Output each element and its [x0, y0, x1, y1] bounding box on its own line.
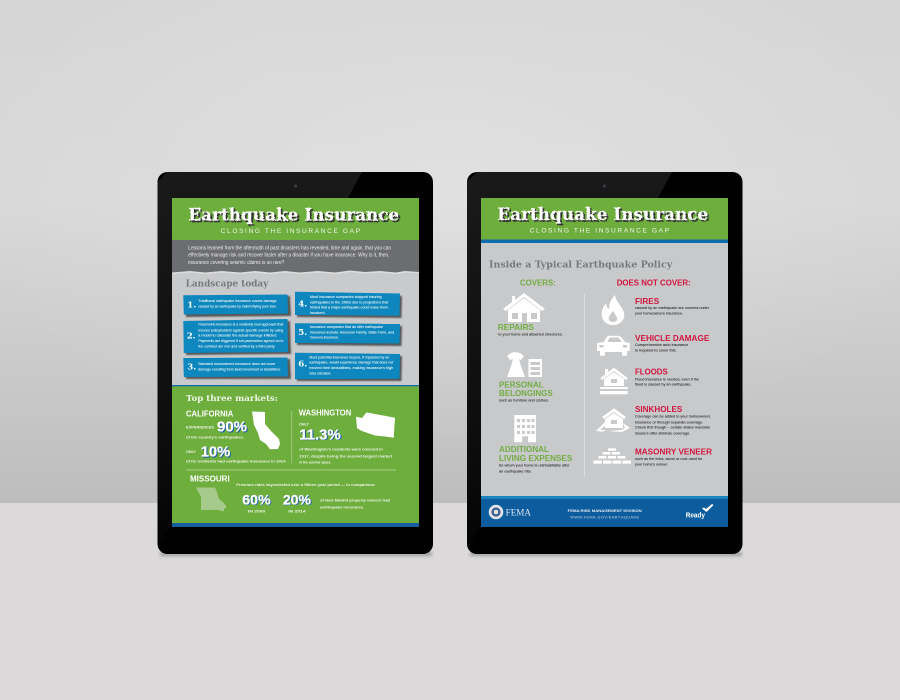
- repairs text: [498, 322, 563, 336]
- tablet: right page: [465, 172, 742, 556]
- icon: apartment building: [514, 415, 536, 442]
- washington stats: 11.3%: [300, 427, 342, 444]
- callout 6: [295, 353, 402, 381]
- fires text: caused by an earthquake are covered under: [635, 306, 710, 310]
- personal belongings text: BELONGINGS: [499, 388, 553, 398]
- callout 1: caused by an earthquake by indemnifying pure loss.: [198, 304, 277, 309]
- sinkholes text: Check first though – certain states mandate: [635, 426, 710, 430]
- sinkholes text: insurance or through separate coverage.: [635, 420, 703, 424]
- callout 1: Traditional earthquake insurance covers damage: [198, 298, 277, 303]
- washington stats: ONLY: [299, 422, 309, 427]
- washington stats: [299, 409, 393, 464]
- fires text: [635, 296, 710, 316]
- additional living expenses text: ADDITIONAL: [499, 444, 549, 454]
- callout 4: 4.: [298, 300, 307, 310]
- callout 4: Most insurance companies stopped insuring: [310, 294, 382, 299]
- icon: ready check mark: [686, 504, 714, 520]
- callout 6: earthquake, would experience damage that does not: [309, 360, 394, 365]
- icon: house repairs: [503, 293, 545, 322]
- repairs text: REPAIRS: [498, 322, 534, 332]
- tablet: left page: [155, 172, 433, 556]
- california stats: 10%: [201, 444, 230, 461]
- additional living expenses text: [499, 444, 573, 473]
- california stats: 90%: [218, 420, 248, 437]
- masonry veneer text: such as the brick, stone or rock used for: [635, 457, 703, 461]
- california stats: of the country's earthquakes.: [186, 435, 244, 440]
- icon: california map: [252, 412, 280, 449]
- footer: FEMA RISK MANAGEMENT DIVISION: [568, 508, 642, 513]
- masonry veneer text: MASONRY VENEER: [635, 446, 713, 456]
- callout 1: 1.: [187, 301, 196, 311]
- green header with title: Earthquake Insurance: [497, 205, 708, 224]
- additional living expenses text: an earthquake hits.: [499, 469, 532, 473]
- callout 3: [183, 358, 291, 379]
- callout 6: 6.: [298, 360, 307, 370]
- vehicle damage text: is required to cover this.: [635, 349, 677, 353]
- callout 5: insurance include: American Family, State Farm, and: [310, 329, 394, 334]
- callout 4: hinted that a major earthquake could make them: [310, 305, 388, 310]
- washington stats: 2017, despite being the second largest market: [299, 453, 393, 458]
- missouri stats: of New Madrid property owners had: [320, 498, 391, 503]
- sinkholes text: Coverage can be added to your homeowners: [635, 415, 710, 419]
- callout 4: insolvent.: [310, 310, 326, 315]
- callout 2: a model to calculate the actual damage inflicted.: [198, 333, 277, 338]
- callout 3: 3.: [187, 362, 196, 372]
- callout 1: [183, 294, 291, 317]
- california stats: 10%: [202, 445, 231, 462]
- green header with title: Earthquake Insurance: [188, 205, 399, 224]
- missouri stats: IN 2014: [288, 508, 307, 513]
- california stats: EXPERIENCES: [186, 425, 214, 430]
- green header with title: Earthquake Insurance: [190, 207, 401, 226]
- callout 2: [183, 319, 291, 355]
- missouri stats: [190, 474, 391, 513]
- washington stats: 11.3%: [299, 426, 341, 443]
- gray intro band: insurance covering seismic claims is so rare?: [188, 260, 284, 266]
- footer: [481, 496, 728, 527]
- panel: top three markets: [172, 385, 419, 527]
- callout 6: exceed their deductibles, making insurance's high: [309, 365, 393, 370]
- missouri stats: 60%: [243, 493, 272, 508]
- icon: clothes and dresser: [507, 352, 542, 377]
- washington stats: of Washington's residents were covered in: [299, 447, 383, 452]
- body panel: [481, 243, 728, 497]
- washington stats: WASHINGTON: [299, 409, 352, 418]
- callout 2: Parametric insurance is a relatively new approach that: [198, 322, 284, 327]
- missouri stats: 20%: [284, 493, 312, 508]
- personal belongings text: [499, 379, 553, 403]
- callout 6: Most potential insurance buyers, if impacted by an: [309, 355, 389, 360]
- green header with title: CLOSING THE INSURANCE GAP: [221, 228, 361, 235]
- missouri stats: 20%: [283, 492, 311, 507]
- green header with title: CLOSING THE INSURANCE GAP: [530, 228, 670, 235]
- fires text: FIRES: [635, 296, 660, 306]
- callout 4: [295, 292, 402, 318]
- icon: FEMA seal: [489, 505, 503, 519]
- callout 6: rates untenable.: [309, 370, 331, 375]
- california stats: 90%: [217, 419, 247, 436]
- callout 4: earthquakes in the 1990s due to projections that: [310, 299, 389, 304]
- washington stats: in the seismic space.: [299, 459, 331, 464]
- sinkholes text: SINKHOLES: [635, 404, 683, 414]
- missouri stats: Premium rates skyrocketed over a fifteen year period — in comparison:: [236, 482, 376, 487]
- green header with title: Earthquake Insurance: [499, 206, 710, 225]
- missouri stats: IN 2000: [248, 508, 265, 513]
- floods text: FLOODS: [635, 367, 668, 377]
- california stats: of its residents had earthquake insurance in 2014.: [186, 459, 287, 464]
- additional living expenses text: for whom your home is uninhabitable after: [499, 464, 570, 468]
- callout 2: the contract are met and verified by a third party.: [198, 344, 275, 349]
- icon: washington map: [356, 412, 395, 438]
- masonry veneer text: [635, 446, 713, 466]
- callout 5: 5.: [298, 328, 307, 338]
- gray intro band: Lessons learned from the aftermath of past disasters has revealed, time and again, that you can: [188, 245, 391, 251]
- vehicle damage text: VEHICLE DAMAGE: [635, 333, 710, 343]
- missouri stats: MISSOURI: [190, 474, 230, 483]
- callout 2: Payments are triggered if set parameters agreed on in: [198, 338, 283, 343]
- fires text: your homeowners insurance.: [635, 312, 683, 316]
- vehicle damage text: [635, 333, 710, 353]
- footer: WWW.FEMA.GOV/EARTHQUAKE: [570, 515, 639, 519]
- sinkholes text: [635, 404, 710, 435]
- repairs text: to your home and attached structures.: [498, 332, 563, 336]
- icon: car: [597, 336, 630, 356]
- california stats: ONLY: [186, 449, 196, 454]
- heading: top three markets: Top three markets:: [186, 394, 278, 404]
- green header with title: [172, 198, 419, 240]
- gray intro band: effectively manage risk and recover faster after a disaster if you have insurance. Why is it, then,: [188, 253, 389, 259]
- icon: brick pile: [593, 448, 631, 464]
- callout 3: Standard homeowners insurance does not cover: [198, 361, 276, 366]
- icon: missouri map: [196, 488, 227, 512]
- floods text: flood is caused by an earthquake.: [635, 383, 692, 387]
- heading: does not cover: DOES NOT COVER:: [617, 279, 691, 288]
- icon: fire: [602, 295, 624, 325]
- callout 2: insures policyholders against specific events by using: [198, 327, 283, 332]
- footer: FEMA: [506, 508, 531, 518]
- green header with title: [481, 198, 728, 243]
- icon: ready check mark: Ready: [686, 513, 705, 520]
- california stats: [186, 410, 287, 464]
- callout 5: Insurance companies that do offer earthquake: [310, 324, 383, 329]
- heading: covers: COVERS:: [520, 279, 556, 288]
- sinkholes text: insurers offer sinkhole coverage.: [635, 431, 690, 435]
- personal belongings text: such as furniture and clothes.: [499, 399, 549, 403]
- masonry veneer text: your home's veneer.: [635, 462, 668, 466]
- additional living expenses text: LIVING EXPENSES: [499, 453, 573, 463]
- floods text: [635, 367, 699, 387]
- floods text: Flood insurance is needed, even if the: [635, 377, 699, 381]
- heading: landscape today: Landscape today: [186, 280, 269, 290]
- california stats: CALIFORNIA: [186, 410, 234, 419]
- callout 5: Geovera Insurance.: [310, 335, 339, 340]
- callout 5: [295, 323, 402, 346]
- callout 2: 2.: [187, 331, 196, 341]
- gray intro band: [172, 240, 419, 385]
- personal belongings text: PERSONAL: [499, 379, 544, 389]
- callout 3: damage resulting from land movement or landslides.: [198, 367, 281, 372]
- vehicle damage text: Comprehensive auto insurance: [635, 343, 688, 347]
- missouri stats: 60%: [242, 492, 271, 507]
- icon: flooded house: [600, 368, 628, 394]
- missouri stats: earthquake insurance.: [320, 504, 364, 509]
- icon: sinkhole: [596, 408, 630, 432]
- heading: inside a typical earthquake policy: Inside a Typical Earthquake Policy: [489, 260, 673, 271]
